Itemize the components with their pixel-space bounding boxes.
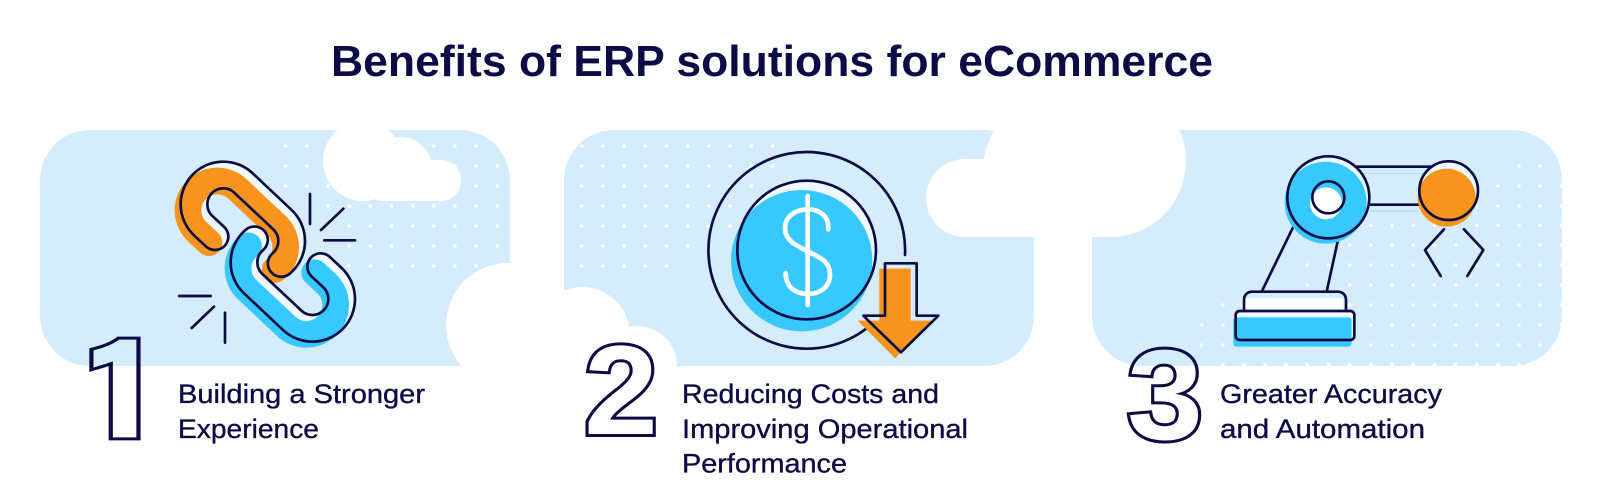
caption 2: Improving Operational bbox=[682, 414, 968, 444]
caption 3: Greater Accuracy bbox=[1220, 379, 1443, 409]
panel 1 background bbox=[40, 130, 510, 366]
number 1: 1 bbox=[76, 326, 168, 457]
caption 1: Building a Stronger bbox=[178, 379, 425, 409]
icon: chain links bbox=[174, 160, 356, 348]
icon: robot arm bbox=[1233, 156, 1483, 347]
title: Benefits of ERP solutions for eCommerce bbox=[331, 37, 1213, 86]
caption 2: Performance bbox=[682, 448, 847, 478]
caption 2: Reducing Costs and bbox=[682, 379, 939, 409]
number 2: 2 bbox=[584, 319, 658, 461]
caption 3: and Automation bbox=[1220, 414, 1425, 444]
clouds: white shapes cutting the panels bbox=[323, 130, 1186, 366]
caption 1 bbox=[178, 379, 425, 444]
number 3: 3 bbox=[1127, 324, 1203, 467]
panel 3 background bbox=[1092, 130, 1562, 366]
icon: dollar coin with down arrow bbox=[708, 152, 938, 358]
caption 3 bbox=[1220, 379, 1443, 444]
caption 2 bbox=[682, 379, 968, 478]
caption 1: Experience bbox=[178, 414, 319, 444]
panel 2 background bbox=[564, 130, 1034, 366]
